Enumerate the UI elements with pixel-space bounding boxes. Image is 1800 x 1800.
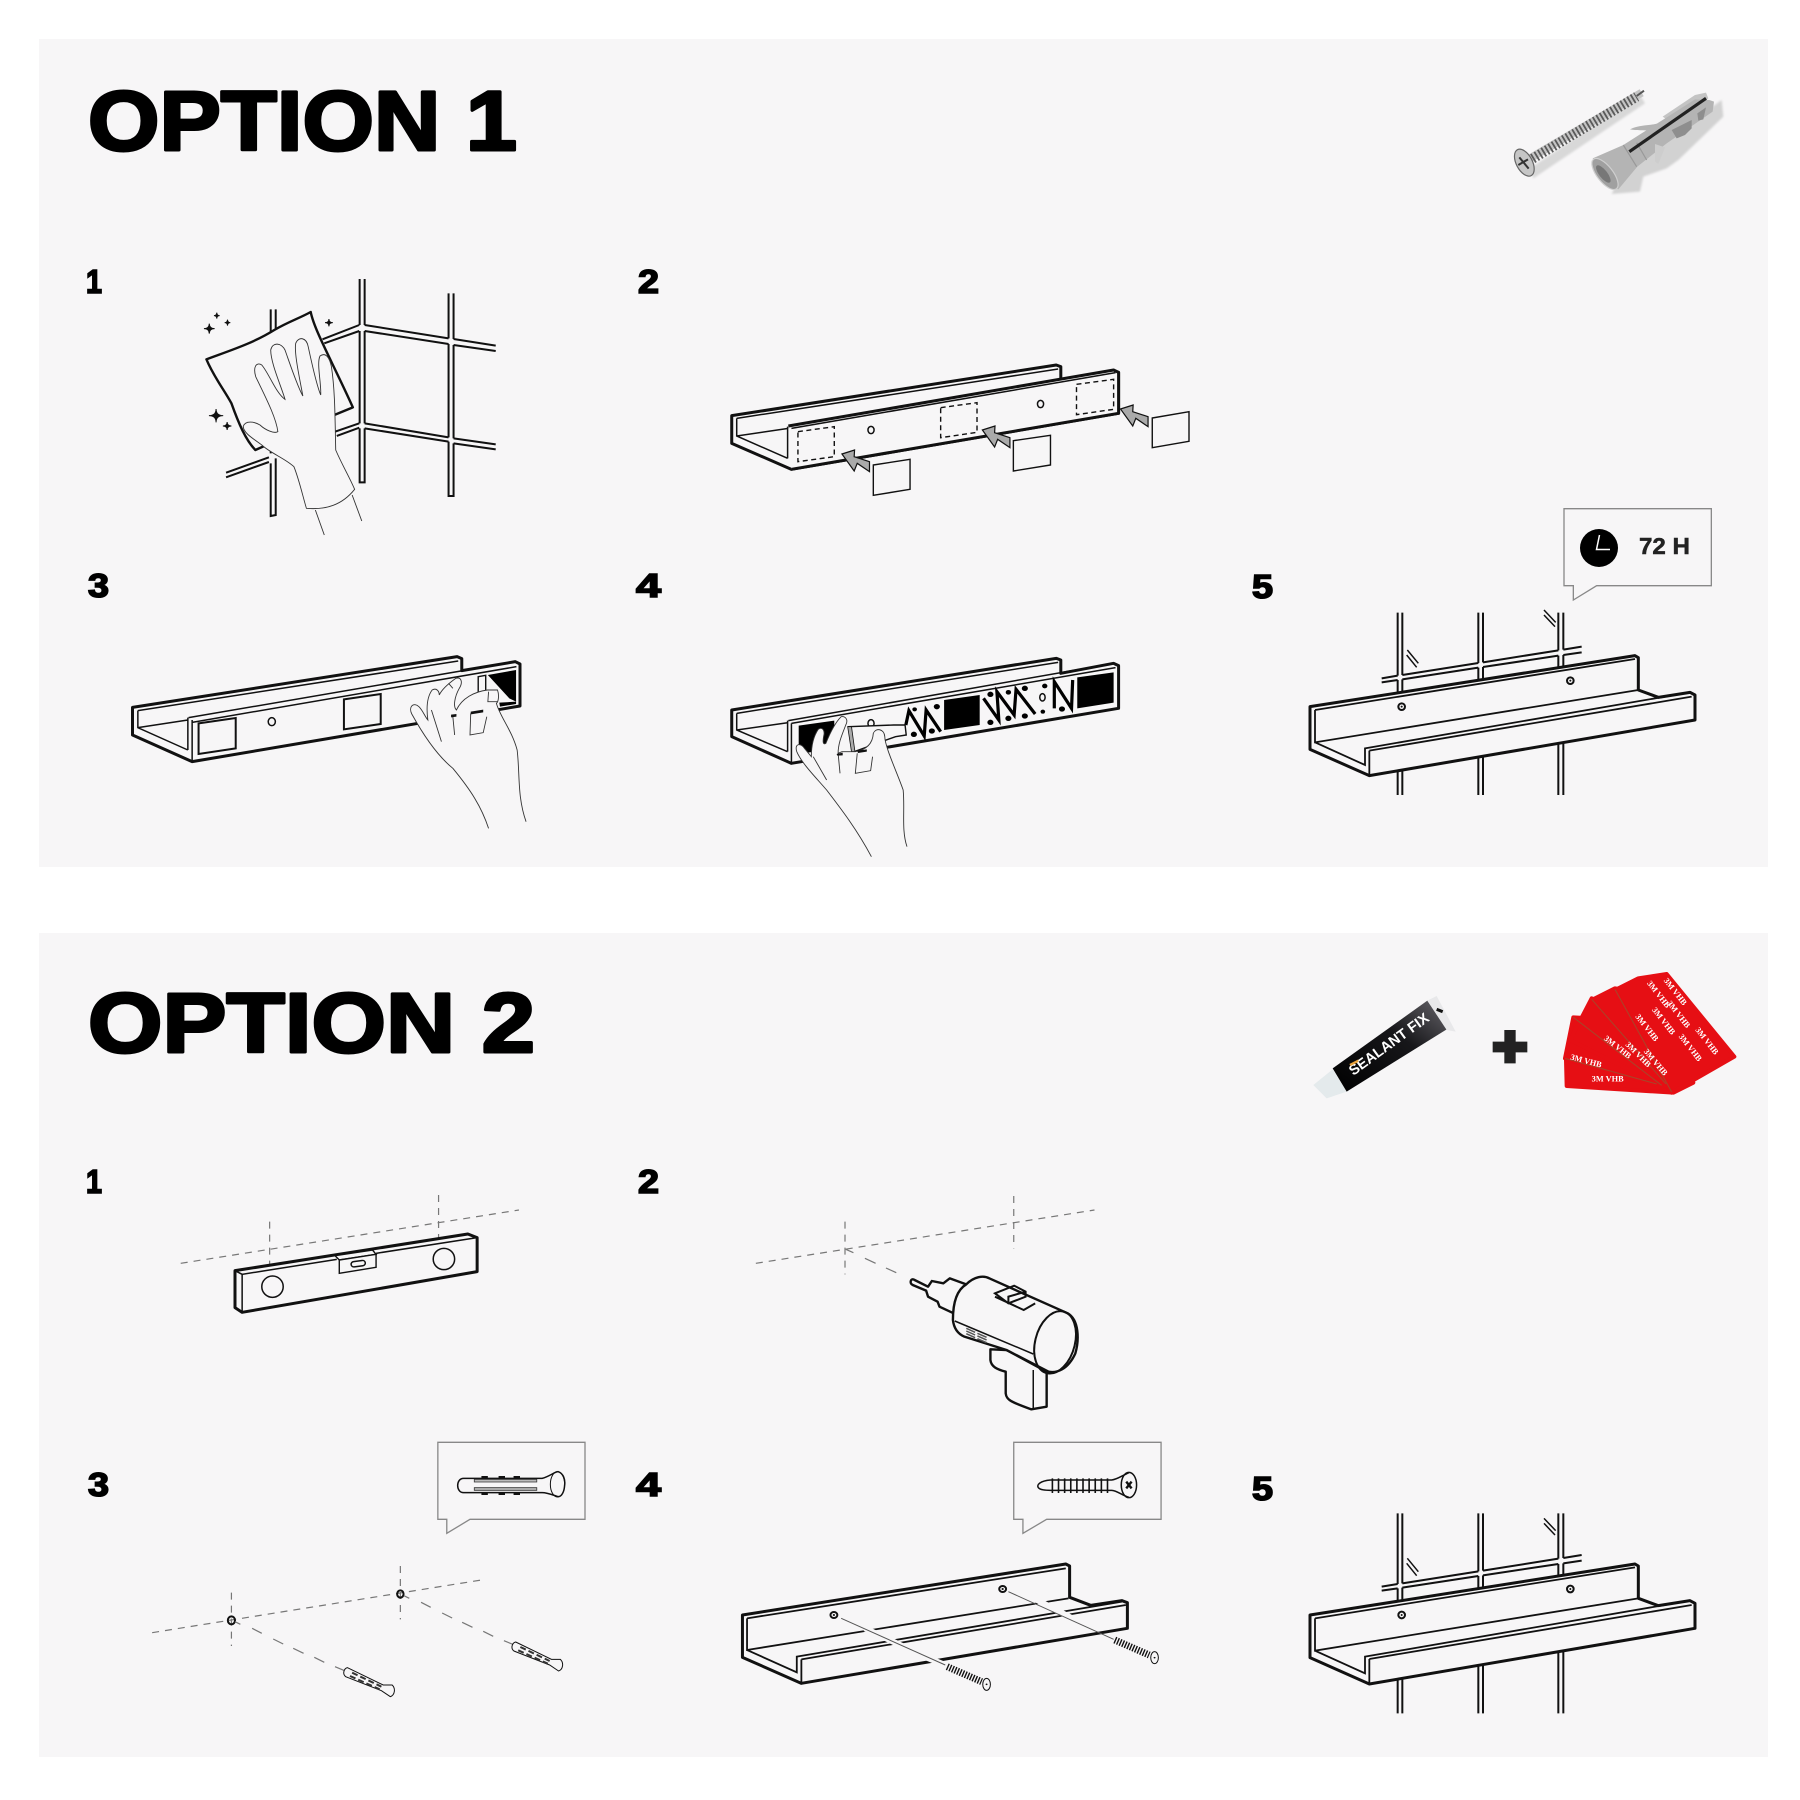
photo: sealant tube, plus sign and red adhesive pads: 3M VHB bbox=[1650, 1006, 1677, 1037]
illustration: inserting wall anchors into holes bbox=[152, 1442, 585, 1697]
step 5 number: 5 bbox=[1252, 568, 1273, 605]
photo: sealant tube, plus sign and red adhesive pads: 3M VHB bbox=[1569, 1053, 1603, 1070]
anchor body bbox=[1630, 123, 1661, 131]
photo: sealant tube, plus sign and red adhesive pads: 3M VHB bbox=[1602, 1034, 1633, 1061]
callout: wall anchor bbox=[438, 1442, 585, 1533]
step 4 number: 4 bbox=[636, 1466, 662, 1503]
hand bbox=[796, 717, 907, 857]
step 5 number: 5 bbox=[1252, 1470, 1273, 1507]
illustration: finished shelf on the tiled wall bbox=[1310, 610, 1695, 795]
sealant tube bbox=[848, 725, 906, 752]
sealant tube bbox=[1313, 996, 1456, 1098]
arrows bbox=[842, 450, 869, 472]
plus sign bbox=[1493, 1030, 1527, 1063]
sparkles bbox=[204, 313, 333, 430]
step 2 number: 2 bbox=[638, 1163, 659, 1200]
photo: sealant tube, plus sign and red adhesive pads: 3M VHB bbox=[1693, 1026, 1720, 1057]
step 1 number: 1 bbox=[86, 1163, 102, 1200]
photo: sealant tube, plus sign and red adhesive pads: 3M VHB bbox=[1677, 1032, 1704, 1063]
illustration: spirit level on dashed guide lines bbox=[181, 1195, 519, 1312]
sealant tube: SEALANT FIX bbox=[1346, 1010, 1433, 1079]
illustration: peeling adhesive backing off the shelf bbox=[132, 657, 526, 828]
photo: sealant tube, plus sign and red adhesive pads: 3M VHB bbox=[1665, 999, 1692, 1030]
illustration: applying sealant in zigzags bbox=[732, 658, 1119, 857]
pads bbox=[873, 459, 910, 495]
illustration: drill pointed at marked spot bbox=[756, 1196, 1094, 1409]
panel: option 1 bbox=[39, 39, 1768, 867]
drill body bbox=[953, 1277, 1078, 1372]
adhesive pads bbox=[1565, 974, 1734, 1093]
photo: sealant tube, plus sign and red adhesive pads: 3M VHB bbox=[1662, 976, 1689, 1007]
small screws bbox=[947, 1640, 1149, 1682]
title: option 1: OPTION 1 bbox=[88, 74, 517, 168]
photo: sealant tube, plus sign and red adhesive pads: 3M VHB bbox=[1592, 1075, 1624, 1084]
photo: sealant tube, plus sign and red adhesive pads bbox=[1313, 974, 1734, 1098]
illustration: finished shelf screwed to the tiled wall bbox=[1310, 1513, 1695, 1713]
step 3 number: 3 bbox=[88, 567, 109, 604]
illustration: shelf back with adhesive pads and arrows bbox=[732, 365, 1189, 495]
callout: 72 hours bbox=[1564, 509, 1711, 600]
small anchors bbox=[344, 1668, 394, 1697]
drill handle bbox=[990, 1349, 1047, 1409]
photo: sealant tube, plus sign and red adhesive pads: 3M VHB bbox=[1624, 1040, 1653, 1069]
cloth bbox=[206, 312, 353, 450]
step 4 number: 4 bbox=[636, 567, 662, 604]
title: option 2: OPTION 2 bbox=[88, 976, 535, 1070]
step 2 number: 2 bbox=[638, 263, 659, 300]
panel: option 2 bbox=[39, 933, 1768, 1757]
photo: sealant tube, plus sign and red adhesive pads: 3M VHB bbox=[1633, 1012, 1660, 1043]
drill chuck bbox=[911, 1278, 966, 1313]
photo: screw and wall anchor bbox=[1510, 91, 1723, 194]
illustration: screwing the shelf to the wall bbox=[742, 1442, 1161, 1690]
step 3 number: 3 bbox=[88, 1466, 109, 1503]
illustration: cleaning the tiled wall with a cloth bbox=[204, 279, 496, 535]
hand bbox=[243, 339, 355, 509]
callout: screw bbox=[1014, 1442, 1161, 1533]
hand bbox=[411, 678, 526, 828]
photo: sealant tube, plus sign and red adhesive pads: 3M VHB bbox=[1645, 979, 1672, 1010]
label: 72 H: 72 H bbox=[1639, 533, 1690, 559]
step 1 number: 1 bbox=[86, 263, 102, 300]
icon: clock bbox=[1580, 529, 1618, 567]
photo: sealant tube, plus sign and red adhesive pads: 3M VHB bbox=[1642, 1047, 1670, 1078]
